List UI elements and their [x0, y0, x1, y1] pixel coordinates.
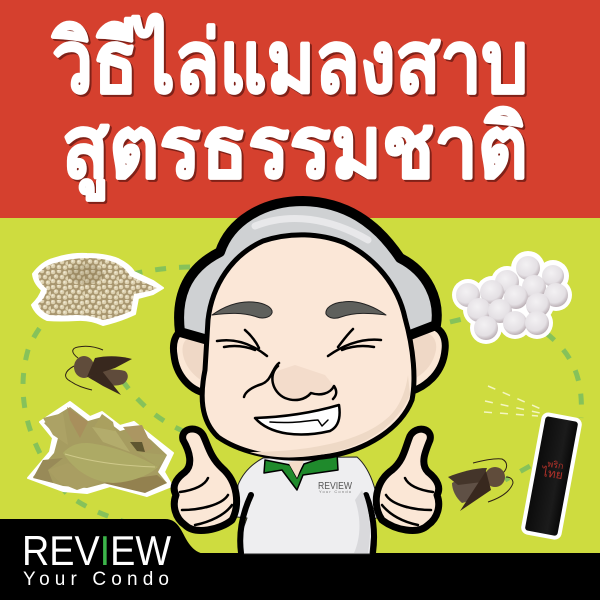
right eyebrow	[326, 302, 386, 318]
title: สูตรธรรมชาติ	[64, 102, 530, 203]
left eyebrow	[212, 302, 272, 318]
left eye	[217, 330, 267, 356]
title: สูตรธรรมชาติ	[62, 100, 528, 201]
collar	[264, 453, 338, 490]
mouth	[255, 405, 340, 435]
photo: white pepper	[32, 254, 163, 325]
base leaves	[33, 407, 167, 491]
shirt logo tagline: Your Condo	[319, 489, 352, 494]
photo: pepper spray bottle	[522, 414, 581, 538]
icon: cockroach left	[66, 346, 132, 395]
logo tab	[0, 519, 205, 590]
bottom bar	[0, 553, 600, 600]
title	[51, 13, 530, 203]
shirt side outlines	[240, 495, 374, 553]
title: วิธีไล่แมลงสาบ	[53, 15, 530, 113]
nose	[244, 363, 336, 400]
logo wordmark: REVIEW	[22, 527, 171, 574]
bottle label: ไทย	[540, 465, 564, 482]
logo tagline: Your Condo	[23, 569, 169, 590]
title: วิธีไล่แมลงสาบ	[51, 13, 528, 111]
bottle label: พริก	[547, 459, 564, 471]
icon: cockroach right	[448, 459, 513, 511]
shirt	[237, 453, 378, 554]
right hand thumbs up	[376, 429, 439, 530]
spray mist	[484, 386, 541, 416]
photo: bay leaves	[28, 402, 173, 496]
right eye	[328, 329, 381, 356]
left ear	[173, 329, 210, 394]
left hand thumbs up	[174, 429, 237, 530]
header: red banner	[0, 0, 600, 218]
shirt logo: REVIEW	[318, 481, 352, 492]
face	[202, 235, 414, 458]
photo: mothballs	[452, 251, 572, 344]
background: green panel	[0, 218, 600, 554]
dashed trail lines	[23, 267, 581, 522]
hair	[179, 201, 437, 340]
main leaf	[63, 443, 158, 483]
character: mascot	[173, 201, 445, 554]
curled leaf shadow	[130, 442, 145, 452]
right ear	[408, 326, 445, 392]
